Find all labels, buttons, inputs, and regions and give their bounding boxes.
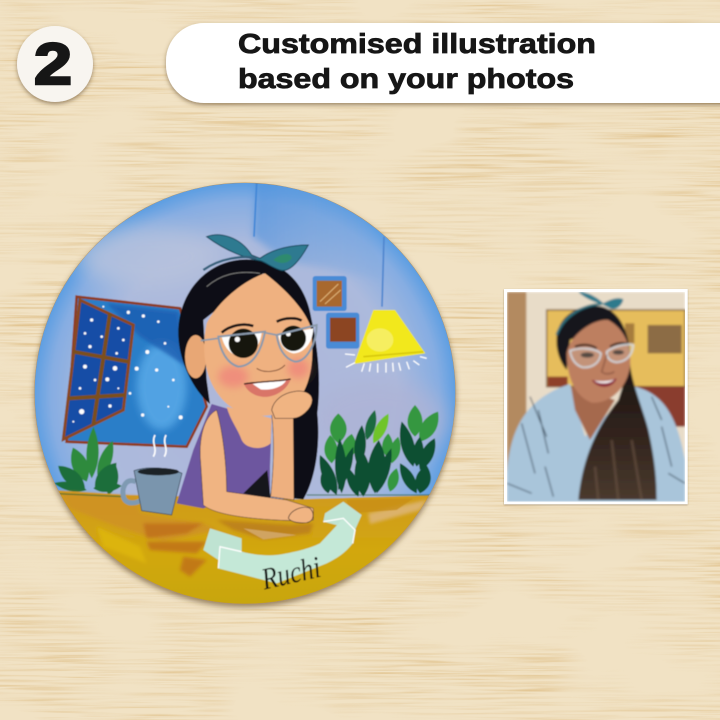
neck [227,407,272,448]
tank top [177,404,272,508]
photo eyebrows and eyes [575,343,628,348]
character [177,235,319,523]
circular painted illustration [30,180,463,613]
left plant [53,426,122,496]
right plant [314,405,444,498]
cheeks [218,358,309,387]
photo nose [602,355,614,374]
ribbon name: Ruchi [258,550,324,597]
ear [185,335,206,378]
step number badge: 2 [34,32,72,97]
heading text [238,28,596,94]
photo shirt [507,384,685,502]
raised arm [271,413,294,500]
glasses [201,325,317,367]
picture frames [313,276,359,349]
photo hairband [557,304,602,335]
face [204,273,312,416]
hair bow [203,235,308,271]
window [63,297,207,447]
step number badge [17,26,93,102]
photo long hair [578,363,657,500]
photo backdrop [507,292,685,471]
eyebrows [222,318,302,333]
photo neck [571,387,615,440]
hand on table [288,507,313,523]
long hair [178,259,319,499]
shoulder and arm [200,410,313,521]
reference photo [504,289,688,504]
nose [257,365,285,372]
name ribbon [203,502,362,597]
photo face [567,320,630,403]
hand under chin [272,391,312,418]
photo smile [592,378,617,387]
photo glasses [570,344,633,367]
heading text: Customised illustration [238,28,596,59]
heading text: based on your photos [238,63,574,94]
coffee mug with steam [123,435,182,515]
wall [34,183,456,500]
table [58,489,430,604]
smile [244,379,291,397]
hanging lamp [345,237,427,373]
photo head hair [556,306,630,370]
heading pill [166,23,720,103]
eyes [222,326,313,358]
